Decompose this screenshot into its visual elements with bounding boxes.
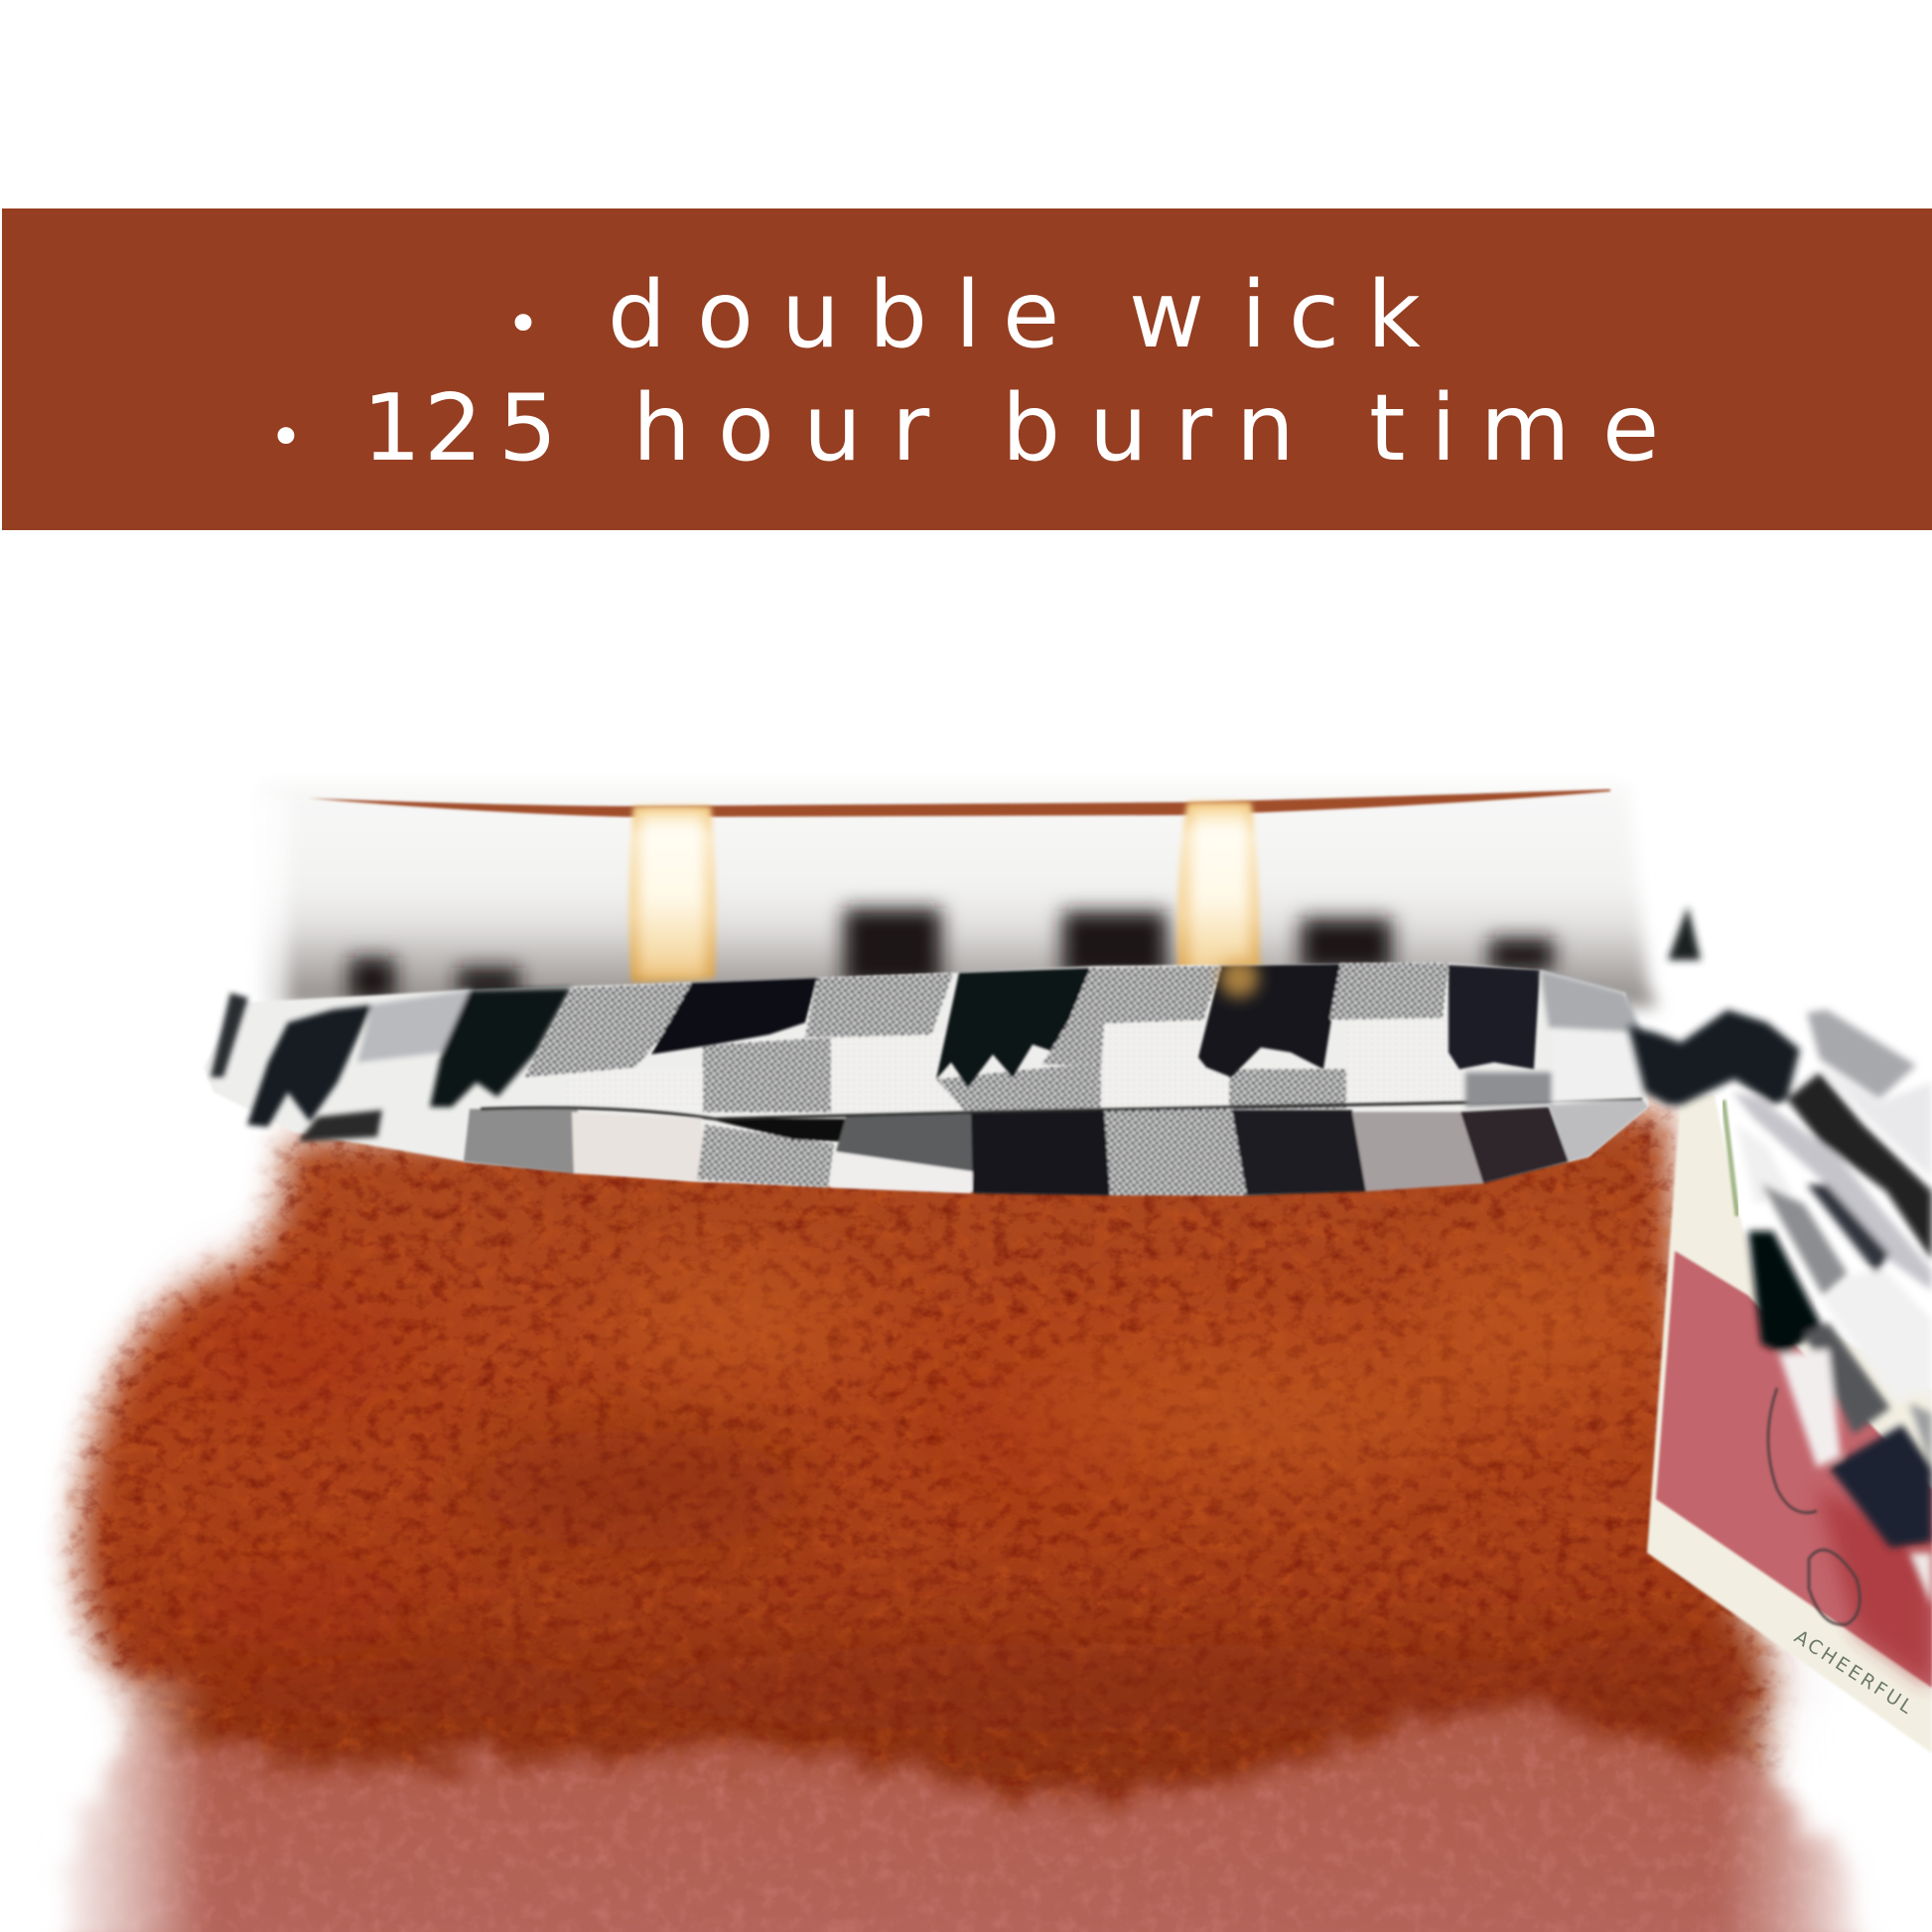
dark stripe: [1807, 1184, 1889, 1274]
left edge fade on pink layer: [0, 1678, 208, 1932]
tail white piece two: [1823, 1271, 1932, 1403]
candle jar photo: [0, 784, 1932, 1932]
ribbon top row, blurred left end: [210, 988, 572, 1142]
right edge fade on pink layer: [1718, 1708, 1932, 1932]
ribbon bottom row: [464, 1099, 1648, 1195]
tail grey right: [1909, 1403, 1932, 1469]
knot spike: [1668, 906, 1701, 960]
candle flame left: [628, 806, 716, 983]
tail black piece: [1748, 1231, 1823, 1354]
feature line: 125 hour burn time: 125 hour burn time: [362, 374, 1659, 482]
feature line: double wick: double wick: [608, 261, 1421, 368]
banner panel: [2, 208, 1932, 530]
feature line: 125 hour burn time: •: [269, 403, 303, 471]
ribbon bow tails: [1628, 906, 1932, 1606]
knot: [1628, 1010, 1800, 1105]
wax rim line: [308, 789, 1610, 817]
lower pink wax layer: [60, 1703, 1866, 1932]
blurred ribbon reflections behind glass: [349, 908, 1554, 1003]
tag script letters: [1768, 1388, 1860, 1624]
tag red panel: [1656, 1251, 1932, 1688]
tag green edge: [1724, 1100, 1737, 1216]
upper grey tail: [1807, 1010, 1916, 1099]
ribbon blurred right end: [1465, 970, 1642, 1107]
wax lighter bands: [606, 1231, 1668, 1479]
ribbon top row, sharp centre: [524, 963, 1540, 1087]
hang tag: [1647, 1095, 1932, 1753]
grey stripe upper: [1732, 1092, 1932, 1291]
tag dark red shading: [1817, 1489, 1932, 1688]
tail dark grey: [1804, 1322, 1890, 1435]
tag brand text: ACHEERFUL: [1790, 1626, 1919, 1720]
tail navy: [1829, 1425, 1932, 1548]
white upper piece: [1820, 1065, 1932, 1178]
feature line: double wick: •: [506, 290, 540, 357]
wax red patches: [179, 1281, 1152, 1658]
tail white piece: [1736, 1124, 1792, 1204]
frayed white bottom: [1909, 1553, 1932, 1606]
tag card: [1647, 1095, 1932, 1753]
glass rim and neck: [248, 784, 1658, 1023]
candle flame right: [1176, 802, 1260, 993]
wax dark mottling: [159, 1430, 1767, 1737]
flame glow over ribbon: [1219, 958, 1259, 998]
glass highlight: [248, 794, 288, 1023]
ribbon base: [204, 963, 1648, 1194]
buffalo check ribbon: [204, 958, 1648, 1195]
dark band: [1787, 1072, 1932, 1261]
wax body: [0, 1112, 1932, 1932]
ribbon middle row: [566, 1020, 1465, 1112]
tail grey piece: [1761, 1183, 1848, 1296]
frayed white piece: [1779, 1349, 1841, 1467]
